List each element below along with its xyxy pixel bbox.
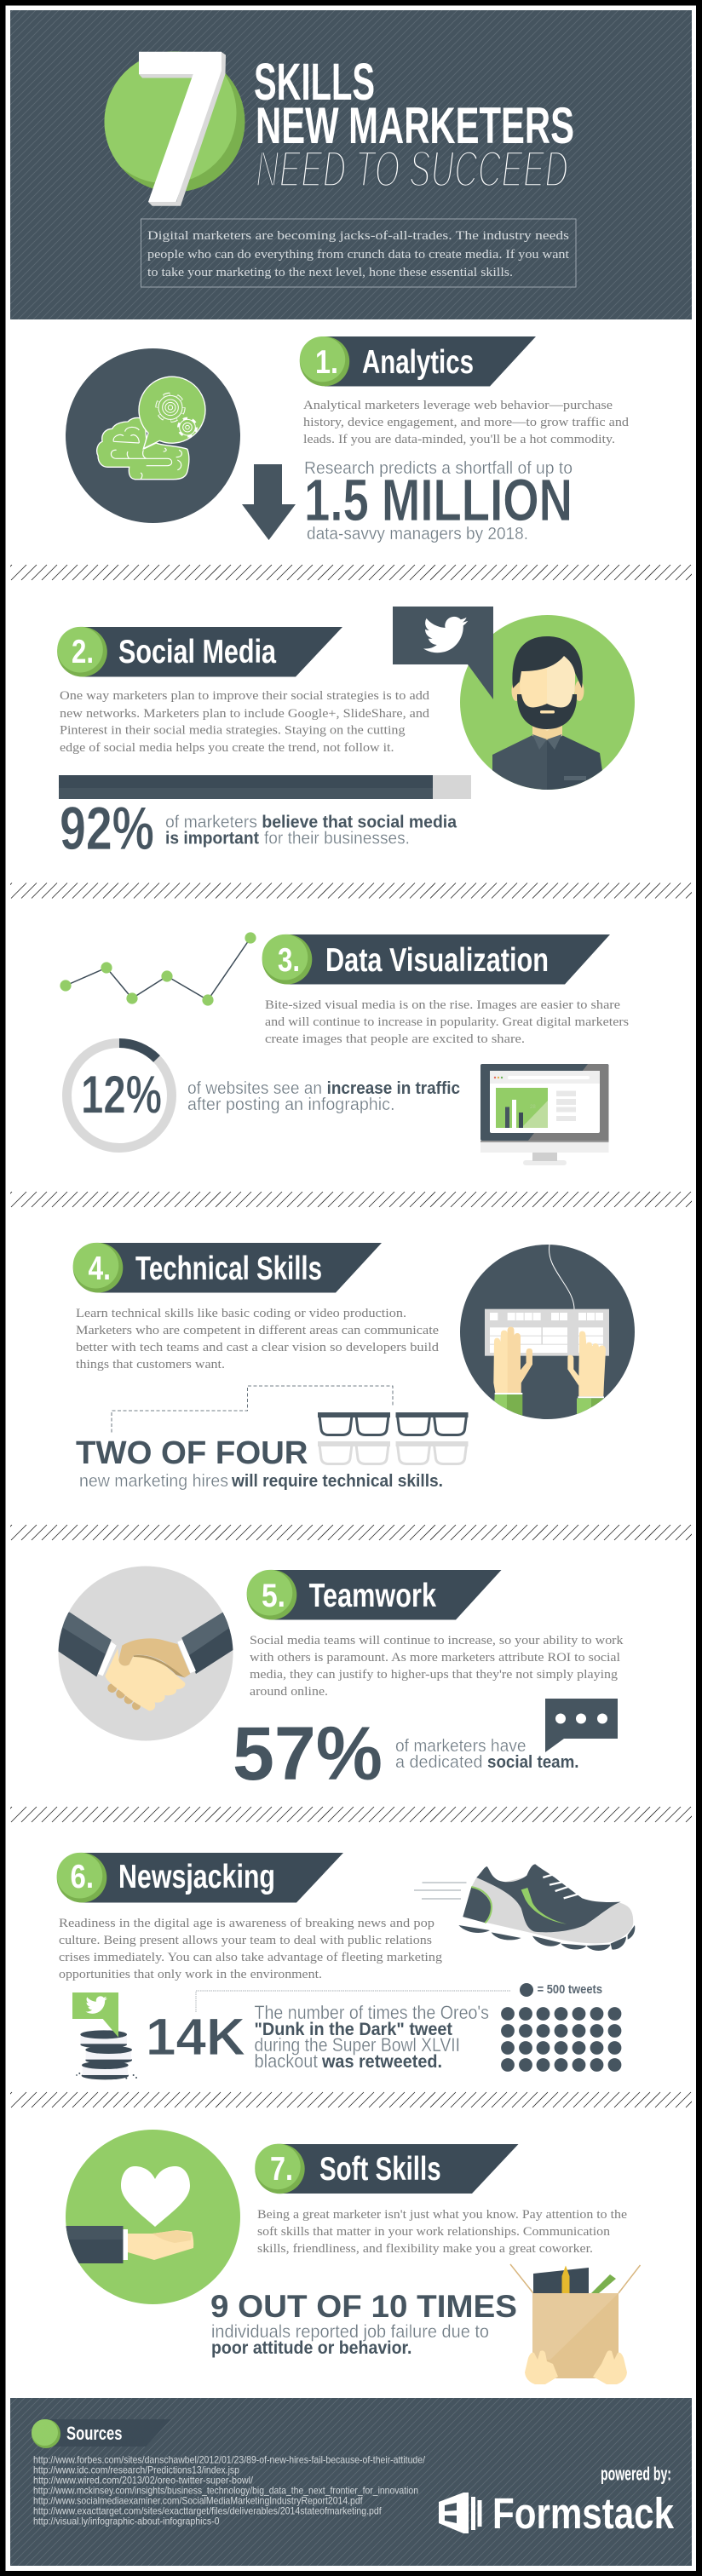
intro text box bbox=[141, 219, 576, 287]
stat: 92 percent bbox=[60, 796, 457, 863]
text: soft skills body: skills, friendliness, and flexibility make you a great coworker. bbox=[257, 2242, 593, 2256]
text: newsjacking body: opportunities that only work in the environment. bbox=[59, 1968, 322, 1981]
dotted connector bbox=[196, 1991, 510, 2012]
text: traffic stat: of websites see an bbox=[187, 1079, 322, 1098]
text: technical skills body bbox=[76, 1307, 440, 1371]
stat: 92 percent: believe that social media bbox=[262, 813, 457, 831]
panel: teamwork bbox=[57, 1566, 624, 1796]
heading banner 2: 2. bbox=[72, 634, 94, 670]
text: source list: http://www.mckinsey.com/insights/business_technology/big_data_the_next_frontier_for_innovation bbox=[33, 2484, 418, 2496]
heading banner 5: 5. bbox=[262, 1578, 285, 1614]
text: data visualization body: Bite-sized visual media is on the rise. Images are easier to share bbox=[265, 998, 620, 1012]
text: social media body: Pinterest in their social media strategies. Staying on the cutting bbox=[60, 724, 406, 738]
text: social media body: new networks. Marketers plan to include Google+, SlideShare, and bbox=[60, 707, 430, 721]
stat: two of four bbox=[76, 1435, 443, 1491]
title: SKILLS bbox=[254, 53, 375, 111]
text: newsjacking body bbox=[59, 1917, 443, 1981]
text: oreo retweets: during the Super Bowl XLVII bbox=[254, 2034, 460, 2056]
heading banner 4 bbox=[73, 1243, 382, 1293]
arrow: down bbox=[242, 464, 296, 540]
divider bbox=[6, 2092, 701, 2107]
icon: chat bubble bbox=[545, 1699, 618, 1752]
panel: header bbox=[10, 10, 692, 319]
text: data visualization body bbox=[265, 998, 629, 1046]
heading banner 4: Technical Skills bbox=[135, 1251, 322, 1287]
text: source list: http://www.forbes.com/sites/danschawbel/2012/01/23/89-of-new-hires-fail-because-of-their-attitude/ bbox=[33, 2453, 426, 2465]
heading: sources bbox=[32, 2419, 171, 2448]
legend: 500 tweets: = 500 tweets bbox=[538, 1982, 602, 1997]
heading banner 5: Teamwork bbox=[309, 1578, 436, 1614]
intro text box: to take your marketing to the next level, hone these essential skills. bbox=[147, 266, 513, 279]
heading banner 1: Analytics bbox=[362, 344, 474, 381]
divider bbox=[6, 883, 701, 898]
stat: 1.5 million: Research predicts a shortfall of up to bbox=[304, 459, 573, 478]
stat: two of four: new marketing hires bbox=[79, 1472, 228, 1491]
stat: nine out of ten: 9 OUT OF 10 TIMES bbox=[210, 2289, 517, 2324]
text: newsjacking body: crises immediately. You can also take advantage of fleeting marketing bbox=[59, 1951, 443, 1964]
donut chart: 12 percent: 12% bbox=[81, 1065, 162, 1124]
stat: nine out of ten: individuals reported job failure due to bbox=[211, 2322, 489, 2342]
panel: social media bbox=[57, 607, 635, 863]
text: source list: http://www.wired.com/2013/02/oreo-twitter-super-bowl/ bbox=[33, 2474, 254, 2486]
heading banner 3: Data Visualization bbox=[325, 942, 549, 979]
text: source list: http://www.socialmediaexaminer.com/SocialMediaMarketingIndustryReport2014.pdf bbox=[33, 2494, 363, 2506]
text: teamwork body: media, they can justify to higher-ups that they're not simply playing bbox=[250, 1668, 619, 1682]
text: source list: http://visual.ly/infographic-about-infographics-0 bbox=[33, 2515, 220, 2527]
heading banner 6: Newsjacking bbox=[118, 1859, 275, 1895]
text: data visualization body: and will continue to increase in popularity. Great digital marketers bbox=[265, 1015, 629, 1029]
text: analytics body: history, device engagement, and more—to grow traffic and bbox=[303, 416, 630, 429]
text: technical skills body: Marketers who are competent in different areas can communicate bbox=[76, 1324, 439, 1337]
text: social media body: edge of social media helps you create the trend, not follow it. bbox=[60, 741, 394, 755]
icon: keyboard and hands bbox=[460, 1245, 635, 1420]
legend: 500 tweets bbox=[520, 1982, 602, 1997]
icon: four pairs of glasses bbox=[318, 1415, 469, 1463]
panel: newsjacking bbox=[57, 1853, 635, 2079]
heading: sources: Sources bbox=[66, 2423, 123, 2444]
icon: monitor with chart bbox=[480, 1064, 608, 1165]
panel: analytics bbox=[66, 336, 630, 543]
stat: 92 percent: for their businesses. bbox=[264, 830, 410, 848]
title: NEW MARKETERS bbox=[256, 97, 574, 154]
icon: twitter speech bubble bbox=[393, 607, 493, 699]
stat: two of four: TWO OF FOUR bbox=[76, 1435, 308, 1471]
heading banner 6 bbox=[57, 1853, 343, 1903]
panel: technical skills bbox=[73, 1243, 635, 1491]
text: traffic stat: increase in traffic bbox=[327, 1079, 460, 1098]
text: technical skills body: Learn technical skills like basic coding or video production. bbox=[76, 1307, 406, 1320]
heading banner 6: 6. bbox=[70, 1859, 94, 1895]
icon: handshake bbox=[57, 1566, 236, 1741]
text: teamwork body: with others is paramount. As more marketers attribute ROI to social bbox=[250, 1651, 620, 1665]
stat: 92 percent: is important bbox=[165, 830, 259, 848]
text: oreo retweets: "Dunk in the Dark" tweet bbox=[254, 2020, 452, 2039]
intro text box: Digital marketers are becoming jacks-of-all-trades. The industry needs bbox=[147, 229, 569, 243]
panel: footer bbox=[10, 2398, 692, 2566]
stat: two of four: will require technical skills. bbox=[231, 1472, 443, 1491]
text: traffic stat: after posting an infographic. bbox=[187, 1095, 395, 1114]
title bbox=[254, 53, 574, 198]
text: social media body bbox=[60, 689, 430, 755]
heading banner 5 bbox=[247, 1570, 501, 1620]
text: oreo retweets: blackout bbox=[254, 2050, 318, 2072]
text: teamwork body: Social media teams will continue to increase, so your ability to work bbox=[250, 1634, 624, 1647]
heading banner 7: 7. bbox=[270, 2151, 293, 2188]
heading banner 3 bbox=[262, 934, 610, 985]
text: oreo retweets: was retweeted. bbox=[321, 2052, 442, 2072]
text: oreo retweets bbox=[254, 2002, 489, 2072]
text: social media body: One way marketers plan to improve their social strategies is to add bbox=[60, 689, 430, 703]
divider bbox=[6, 1525, 701, 1540]
heading banner 4: 4. bbox=[89, 1251, 111, 1287]
line chart bbox=[60, 932, 256, 1006]
text: soft skills body: soft skills that matter in your work relationships. Communication bbox=[257, 2225, 611, 2239]
icon: tweet bubble on cookie stack bbox=[72, 1992, 137, 2079]
text: newsjacking body: culture. Being present allows your team to deal with public relations bbox=[59, 1934, 432, 1947]
icon: heart in hand bbox=[60, 2130, 240, 2304]
stat: 1.5 million: data-savvy managers by 2018. bbox=[307, 525, 528, 543]
panel: soft skills bbox=[60, 2130, 641, 2384]
heading banner 2: Social Media bbox=[118, 634, 276, 670]
stat: 92 percent: of marketers bbox=[165, 813, 257, 831]
bar chart: 92 percent progress bbox=[59, 775, 471, 799]
text: technical skills body: better with tech teams and cast a clear vision so developers build bbox=[76, 1341, 440, 1354]
text: newsjacking body: Readiness in the digital age is awareness of breaking news and pop bbox=[59, 1917, 434, 1930]
divider bbox=[6, 565, 701, 580]
stat: 14K: 14K bbox=[146, 2008, 245, 2066]
heading banner 7: Soft Skills bbox=[319, 2151, 441, 2188]
heading banner 1: 1. bbox=[315, 344, 338, 381]
heading banner 1 bbox=[300, 336, 536, 387]
text: data visualization body: create images that people are excited to share. bbox=[265, 1032, 525, 1046]
divider bbox=[6, 1192, 701, 1207]
pictogram: tweet dots bbox=[501, 2007, 621, 2072]
icon: bearded man with tweet bubble bbox=[393, 607, 635, 792]
stat: 57 percent bbox=[233, 1711, 579, 1796]
icon: paper bag with supplies bbox=[510, 2264, 641, 2384]
text: analytics body bbox=[303, 399, 630, 446]
text: soft skills body: Being a great marketer isn't just what you know. Pay attention to the bbox=[257, 2208, 627, 2222]
text: analytics body: Analytical marketers leverage web behavior—purchase bbox=[303, 399, 613, 412]
dashed connector bbox=[112, 1386, 393, 1433]
stat: nine out of ten bbox=[210, 2289, 517, 2358]
icon: running shoe bbox=[414, 1864, 635, 1951]
text: source list: http://www.idc.com/research/Predictions13/index.jsp bbox=[33, 2464, 239, 2475]
text: teamwork body: around online. bbox=[250, 1685, 328, 1699]
divider bbox=[6, 1807, 701, 1822]
text: teamwork body bbox=[250, 1634, 624, 1699]
text: analytics body: leads. If you are data-minded, you'll be a hot commodity. bbox=[303, 433, 615, 446]
stat: 57 percent: 57% bbox=[233, 1711, 383, 1796]
heading banner 2 bbox=[57, 627, 342, 676]
text: technical skills body: things that customers want. bbox=[76, 1358, 225, 1371]
text: source list: http://www.exacttarget.com/sites/exacttarget/files/deliverables/2014stateofmarketing.pdf bbox=[33, 2504, 382, 2516]
logo: formstack bbox=[439, 2489, 675, 2538]
text: traffic stat bbox=[187, 1079, 460, 1114]
text: source list bbox=[33, 2453, 426, 2527]
stat: 1.5 million: 1.5 MILLION bbox=[304, 467, 573, 533]
stat: 57 percent: a dedicated bbox=[395, 1753, 482, 1772]
donut chart: 12 percent bbox=[66, 1043, 172, 1148]
panel: data visualization bbox=[60, 932, 629, 1165]
text: oreo retweets: The number of times the Oreo's bbox=[254, 2002, 489, 2023]
text: soft skills body bbox=[257, 2208, 627, 2256]
icon: monitor with chart: 28 bbox=[530, 1105, 536, 1110]
stat: 57 percent: social team. bbox=[487, 1753, 579, 1772]
stat: 1.5 million bbox=[304, 459, 573, 543]
stat: 92 percent: 92% bbox=[60, 796, 154, 863]
intro text box: people who can do everything from crunch data to create media. If you want bbox=[147, 248, 570, 262]
icon: brain and gears bbox=[66, 348, 240, 523]
stat: 57 percent: of marketers have bbox=[395, 1737, 526, 1756]
stat: nine out of ten: poor attitude or behavior. bbox=[211, 2338, 412, 2358]
heading banner 7 bbox=[255, 2144, 518, 2194]
icon: big seven on green circle bbox=[104, 51, 245, 206]
heading banner 3: 3. bbox=[278, 942, 300, 979]
